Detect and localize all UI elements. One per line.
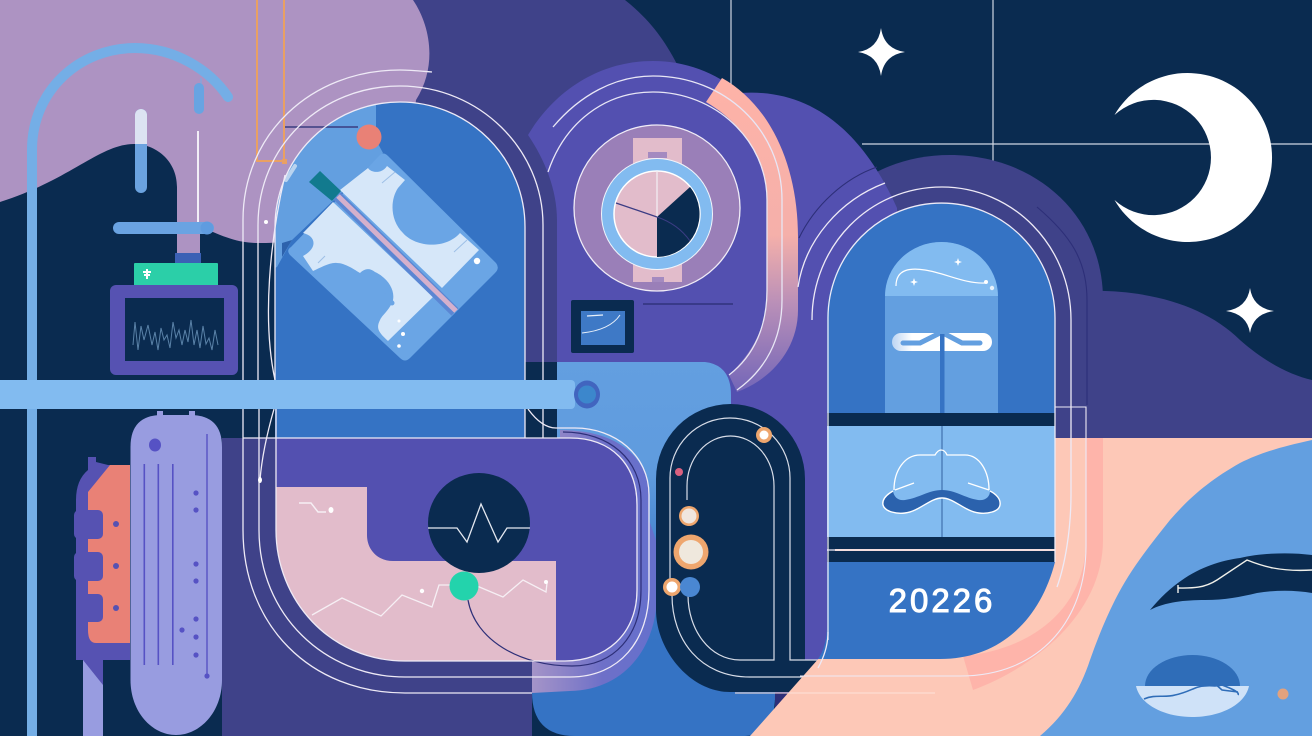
lavender band behind panel (532, 430, 656, 693)
card tab (385, 296, 392, 303)
capsule body (130, 415, 222, 735)
left apparatus: green cap (134, 263, 218, 286)
caption line (643, 303, 733, 305)
dial disc (574, 125, 740, 291)
capsule detail (144, 434, 210, 679)
mustache icon upper (892, 333, 992, 351)
small squiggle (299, 503, 334, 513)
coral plate (88, 465, 130, 643)
connector curve (468, 432, 641, 666)
lavender capsule (130, 411, 222, 735)
horizontal bar (0, 380, 575, 409)
pie wedge (657, 187, 700, 257)
thin dark ring line (799, 167, 1087, 405)
strut (83, 660, 103, 736)
indigo body (76, 457, 130, 660)
monitor (110, 285, 238, 375)
navy pill track (656, 404, 830, 692)
pink chart area (276, 487, 556, 661)
top dark indigo blob (400, 0, 680, 362)
studs (157, 411, 195, 417)
card rod (337, 196, 456, 312)
left apparatus: thin rod (197, 131, 199, 222)
card dots (397, 258, 480, 348)
central arch lines (548, 76, 782, 390)
arch blue top (827, 203, 1055, 414)
card marks (318, 172, 467, 263)
arch 1 (270, 95, 525, 438)
wedge highlight (286, 166, 295, 180)
icon: sparkle top (858, 28, 905, 76)
arch outlines (798, 183, 1086, 676)
indigo central shape (528, 61, 897, 700)
left apparatus: drop (194, 78, 204, 114)
base panel (818, 562, 1055, 659)
half disc icon (1136, 655, 1249, 717)
pulse circle (428, 473, 530, 573)
peach band on central arch (706, 78, 798, 392)
arch background (275, 102, 525, 438)
bar knob (574, 380, 600, 408)
left apparatus: horizontal handle (113, 222, 214, 234)
lower vertical line (941, 426, 943, 537)
lower left dark indigo (222, 438, 532, 736)
watch dial (574, 125, 740, 291)
dome squiggle (896, 258, 994, 290)
peach field (750, 438, 1312, 736)
light section (827, 426, 1055, 537)
panel background (276, 438, 637, 661)
orange bracket (257, 0, 286, 163)
orange dot (1278, 688, 1288, 700)
ring (602, 158, 712, 270)
hands (616, 171, 690, 241)
dome window (885, 242, 998, 413)
strap (633, 138, 682, 282)
small monitor (571, 300, 634, 353)
pill body (656, 404, 820, 692)
grid lines top right (731, 0, 1312, 164)
dark corner fragment (775, 693, 802, 718)
face (614, 171, 700, 257)
navy dividers (827, 413, 1055, 562)
stem (940, 334, 944, 413)
left apparatus: test pill (135, 109, 147, 193)
line chart (312, 580, 547, 616)
green node (450, 572, 478, 600)
side blocks (74, 510, 103, 622)
left apparatus: arc tube (32, 48, 228, 380)
year label: 20226 (889, 582, 995, 619)
mid blue connector (532, 362, 775, 736)
wedge shadow (282, 240, 292, 257)
right dark blob (1060, 291, 1312, 438)
chart dots (420, 580, 548, 593)
left apparatus: stalk base (175, 253, 201, 263)
card white lower half (303, 202, 433, 341)
icon: sparkle right (1226, 288, 1274, 333)
outline rings (243, 70, 649, 693)
lilac blob (0, 0, 429, 253)
light wedge (276, 105, 383, 268)
left arc tube lower (27, 409, 37, 736)
icon: crescent moon (1114, 73, 1272, 242)
blue blob bottom right (1040, 440, 1312, 736)
arch 3 panel (798, 167, 1087, 676)
plate dots (113, 521, 119, 611)
track nodes (663, 427, 772, 597)
hat icon (883, 450, 1000, 513)
rotated card (288, 154, 498, 360)
swoosh line (1178, 560, 1312, 593)
peach lines (735, 692, 935, 694)
track lines (670, 418, 830, 677)
panel: lower chart (276, 432, 641, 666)
ring dots (258, 220, 268, 483)
strap notches (648, 152, 667, 282)
coral node (285, 124, 382, 150)
navy swoosh (1150, 553, 1312, 610)
device backing (74, 457, 130, 736)
rod teal cap (309, 171, 341, 201)
card white upper half (340, 166, 479, 288)
arch 3 dark ring (800, 155, 1103, 438)
peach ring band (963, 438, 1103, 690)
